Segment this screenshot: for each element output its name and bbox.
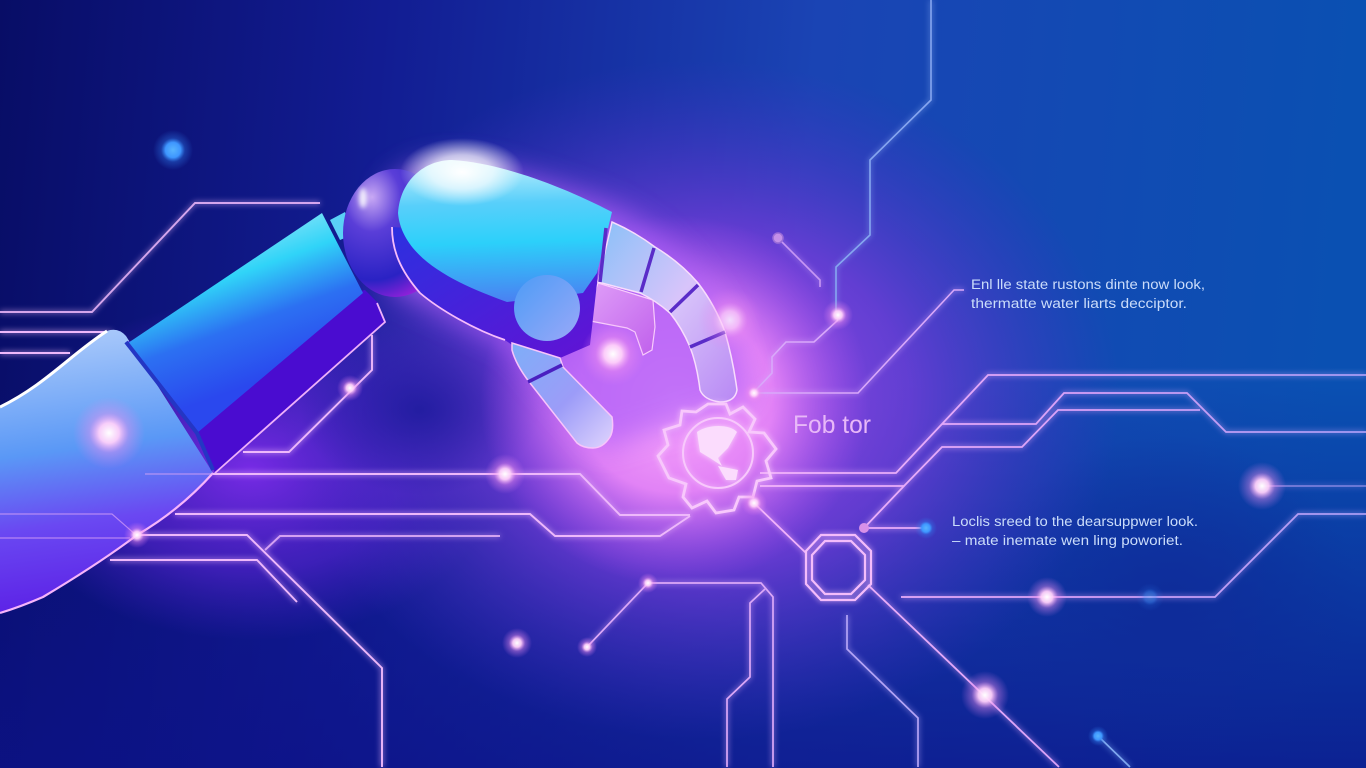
icon: gear with globe bbox=[658, 404, 776, 513]
lower description text: Loclis sreed to the dearsuppwer look. bbox=[952, 514, 1198, 529]
gear label: Fob tor bbox=[793, 411, 871, 439]
upper description text: thermatte water liarts decciptor. bbox=[971, 296, 1187, 311]
upper description text: Enl lle state rustons dinte now look, bbox=[971, 277, 1205, 292]
glowing orb in hand bbox=[581, 322, 645, 386]
circuit lines: upper right bbox=[754, 0, 964, 393]
robot hand: long finger bbox=[598, 222, 737, 402]
glowing nodes bbox=[124, 233, 1286, 719]
circuit lines: bottom bbox=[587, 583, 1130, 767]
circuit lines: right side bbox=[754, 375, 1366, 767]
robot hand: small finger bbox=[585, 283, 655, 355]
icon: octagon node bbox=[806, 535, 871, 600]
lower description text bbox=[952, 514, 1198, 548]
upper description text bbox=[971, 277, 1205, 311]
robot arm: shoulder sphere bbox=[330, 169, 447, 297]
circuit lines: left side bbox=[0, 203, 690, 767]
blue glowing nodes bbox=[153, 130, 1164, 746]
robot arm: forearm bbox=[0, 330, 213, 613]
robot arm: upper arm bbox=[126, 213, 385, 473]
hand halo glow bbox=[385, 162, 750, 450]
glowing orb by fingertip bbox=[698, 288, 762, 352]
robot hand: palm bbox=[392, 138, 612, 358]
robot hand: thumb bbox=[512, 343, 613, 448]
lower description text: – mate inemate wen ling poworiet. bbox=[952, 533, 1183, 548]
robot hand: thumb joint bbox=[514, 275, 580, 341]
